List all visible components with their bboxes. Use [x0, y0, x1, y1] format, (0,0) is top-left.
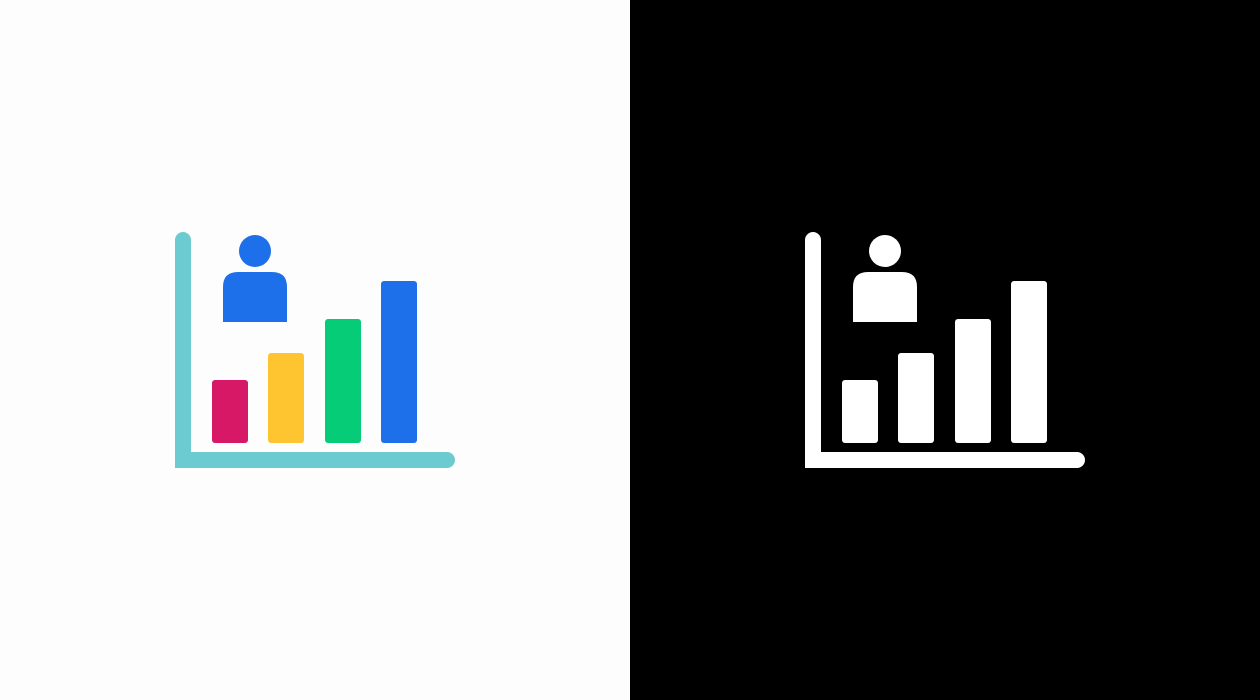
- icon: white bar chart with person: [813, 235, 1077, 460]
- chart axes: [183, 240, 447, 460]
- bars: [842, 281, 1047, 443]
- chart axes: [813, 240, 1077, 460]
- bar: yellow: [268, 353, 304, 443]
- icon: color bar chart with person: [183, 235, 447, 460]
- panel: light background: [0, 0, 630, 700]
- bar: blue: [381, 281, 417, 443]
- panel: dark background: [630, 0, 1260, 700]
- icon: person: [853, 235, 917, 322]
- bar: green: [325, 319, 361, 443]
- bar: magenta: [212, 380, 248, 443]
- icon: person: [223, 235, 287, 322]
